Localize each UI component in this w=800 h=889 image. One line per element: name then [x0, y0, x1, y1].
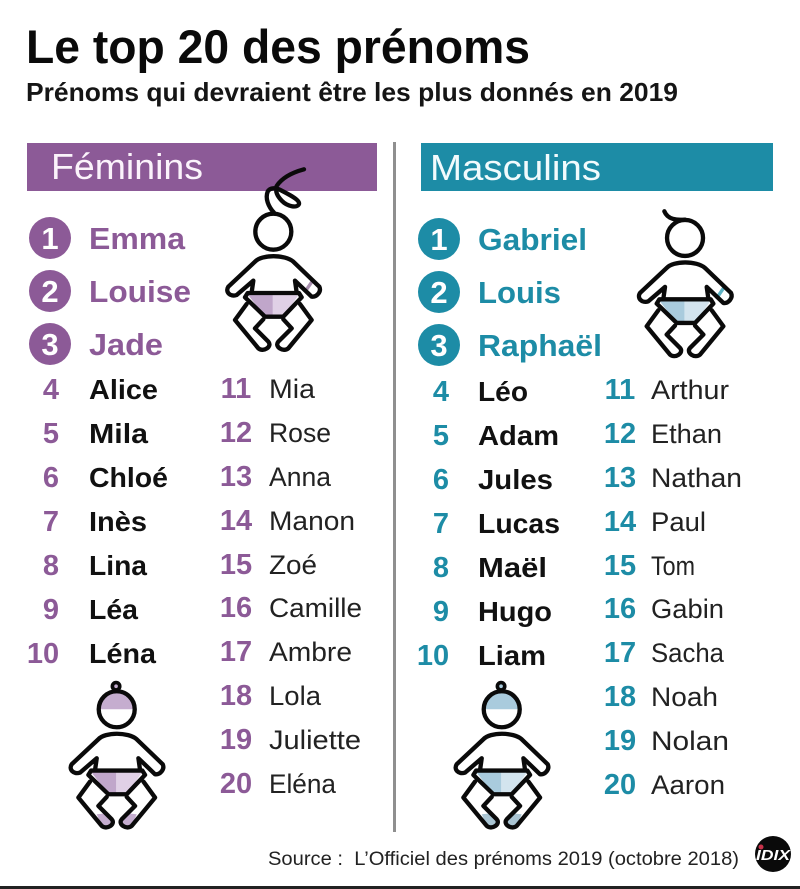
masculine names ranked 4 to 10: Hugo — [478, 596, 552, 627]
top 3 masculine names: Gabriel — [478, 222, 587, 257]
masculine names ranked 11 to 20: 16 — [604, 593, 636, 625]
masculine names ranked 4 to 10: Liam — [478, 640, 546, 671]
masculine names ranked 11 to 20: 15 — [604, 550, 636, 582]
top 3 masculine names: Louis — [478, 275, 561, 310]
top 3 feminine names: Emma — [89, 221, 186, 256]
masculine names ranked 4 to 10: Adam — [478, 420, 559, 451]
masculine names ranked 4 to 10: Léo — [478, 376, 528, 407]
top 3 masculine names — [418, 218, 602, 366]
masculine names ranked 4 to 10: 10 — [417, 640, 449, 672]
masculine names ranked 4 to 10: 6 — [433, 464, 449, 496]
feminine names ranked 4 to 10: Alice — [89, 374, 158, 405]
feminine names ranked 4 to 10: Mila — [89, 418, 148, 449]
feminine names ranked 11 to 20: Zoé — [269, 550, 317, 580]
feminine names ranked 4 to 10: 8 — [43, 550, 59, 582]
feminine names ranked 4 to 10: 5 — [43, 418, 59, 450]
feminine names ranked 11 to 20: 20 — [220, 768, 252, 800]
feminine names ranked 11 to 20: Mia — [269, 374, 316, 404]
top 3 masculine names: 3 — [430, 328, 448, 363]
feminine names ranked 4 to 10: 9 — [43, 594, 59, 626]
masculine names ranked 4 to 10: 9 — [433, 596, 449, 628]
feminine names ranked 11 to 20: Anna — [269, 462, 332, 492]
masculine names ranked 11 to 20: Arthur — [651, 375, 729, 405]
masculine names ranked 11 to 20: 11 — [605, 374, 635, 406]
top 3 feminine names: 3 — [41, 327, 59, 362]
masculine names ranked 11 to 20: Paul — [651, 507, 706, 537]
source note: Source : L’Officiel des prénoms 2019 (octobre 2018) — [268, 849, 739, 870]
masculine names ranked 11 to 20: Gabin — [651, 594, 724, 624]
top 3 feminine names: Jade — [89, 327, 163, 362]
masculine names ranked 11 to 20 — [604, 374, 742, 801]
masculine names ranked 11 to 20: Aaron — [651, 770, 725, 800]
masculine names ranked 11 to 20: Noah — [651, 682, 718, 712]
masculine names ranked 11 to 20: 12 — [604, 418, 636, 450]
divider between columns — [393, 142, 396, 832]
feminine names ranked 11 to 20: Rose — [269, 418, 331, 448]
masculine names ranked 11 to 20: Ethan — [651, 419, 722, 449]
heading: Féminins: Féminins — [51, 146, 203, 187]
panel: masculine names — [417, 143, 773, 801]
masculine names ranked 11 to 20: 13 — [604, 462, 636, 494]
masculine names ranked 4 to 10: 4 — [433, 376, 449, 408]
feminine names ranked 4 to 10: 4 — [43, 374, 59, 406]
masculine names ranked 4 to 10: 5 — [433, 420, 449, 452]
feminine names ranked 11 to 20: Ambre — [269, 637, 352, 667]
feminine names ranked 4 to 10: Léa — [89, 594, 138, 625]
feminine names ranked 4 to 10: 10 — [27, 638, 59, 670]
masculine names ranked 4 to 10: Maël — [478, 552, 547, 583]
masculine names ranked 11 to 20: Sacha — [651, 638, 725, 668]
feminine names ranked 11 to 20: Lola — [269, 681, 322, 711]
feminine names ranked 4 to 10: Inès — [89, 506, 147, 537]
icon: baby girl with bonnet — [71, 683, 163, 827]
panel: feminine names — [27, 143, 377, 800]
feminine names ranked 11 to 20: 14 — [220, 505, 252, 537]
feminine names ranked 4 to 10 — [27, 374, 168, 670]
masculine names ranked 11 to 20: 18 — [604, 681, 636, 713]
heading: Féminins — [27, 143, 377, 191]
feminine names ranked 4 to 10: Chloé — [89, 462, 168, 493]
feminine names ranked 11 to 20: 11 — [221, 373, 251, 405]
top 3 feminine names: 2 — [41, 274, 59, 309]
top 3 feminine names: 1 — [41, 221, 59, 256]
masculine names ranked 11 to 20: Tom — [651, 551, 695, 581]
icon: IDIX logo: IDIX — [756, 847, 791, 864]
masculine names ranked 4 to 10: Lucas — [478, 508, 560, 539]
feminine names ranked 4 to 10: 6 — [43, 462, 59, 494]
masculine names ranked 11 to 20: Nathan — [651, 463, 742, 493]
icon: IDIX logo — [755, 836, 791, 872]
feminine names ranked 11 to 20: Juliette — [269, 725, 361, 755]
heading: Masculins: Masculins — [430, 147, 601, 188]
masculine names ranked 11 to 20: 17 — [604, 637, 636, 669]
icon: baby girl with curl — [227, 169, 320, 350]
icon: baby boy with curl — [639, 211, 732, 356]
feminine names ranked 11 to 20: 18 — [220, 680, 252, 712]
masculine names ranked 11 to 20: 14 — [604, 506, 636, 538]
title: Le top 20 des prénoms — [26, 20, 530, 73]
icon: baby boy with bonnet — [456, 683, 548, 827]
heading: Masculins — [421, 143, 773, 191]
masculine names ranked 11 to 20: 19 — [604, 725, 636, 757]
top 3 masculine names: Raphaël — [478, 328, 602, 363]
masculine names ranked 4 to 10: 8 — [433, 552, 449, 584]
subtitle: Prénoms qui devraient être les plus donnés en 2019 — [26, 77, 678, 107]
top 3 masculine names: 1 — [430, 222, 448, 257]
bottom rule — [0, 886, 800, 889]
top 3 feminine names: Louise — [89, 274, 191, 309]
feminine names ranked 11 to 20: 16 — [220, 592, 252, 624]
feminine names ranked 11 to 20: Camille — [269, 593, 362, 623]
feminine names ranked 11 to 20 — [220, 373, 362, 800]
feminine names ranked 11 to 20: 13 — [220, 461, 252, 493]
masculine names ranked 4 to 10: Jules — [478, 464, 553, 495]
masculine names ranked 11 to 20: Nolan — [651, 726, 729, 756]
feminine names ranked 4 to 10: 7 — [43, 506, 59, 538]
top 3 feminine names — [29, 217, 191, 365]
masculine names ranked 4 to 10 — [417, 376, 560, 672]
top 3 masculine names: 2 — [430, 275, 448, 310]
feminine names ranked 11 to 20: 17 — [220, 636, 252, 668]
feminine names ranked 11 to 20: 12 — [220, 417, 252, 449]
feminine names ranked 11 to 20: 19 — [220, 724, 252, 756]
feminine names ranked 11 to 20: Eléna — [269, 769, 337, 799]
feminine names ranked 11 to 20: Manon — [269, 506, 355, 536]
feminine names ranked 4 to 10: Léna — [89, 638, 156, 669]
feminine names ranked 11 to 20: 15 — [220, 549, 252, 581]
feminine names ranked 4 to 10: Lina — [89, 550, 147, 581]
masculine names ranked 4 to 10: 7 — [433, 508, 449, 540]
masculine names ranked 11 to 20: 20 — [604, 769, 636, 801]
